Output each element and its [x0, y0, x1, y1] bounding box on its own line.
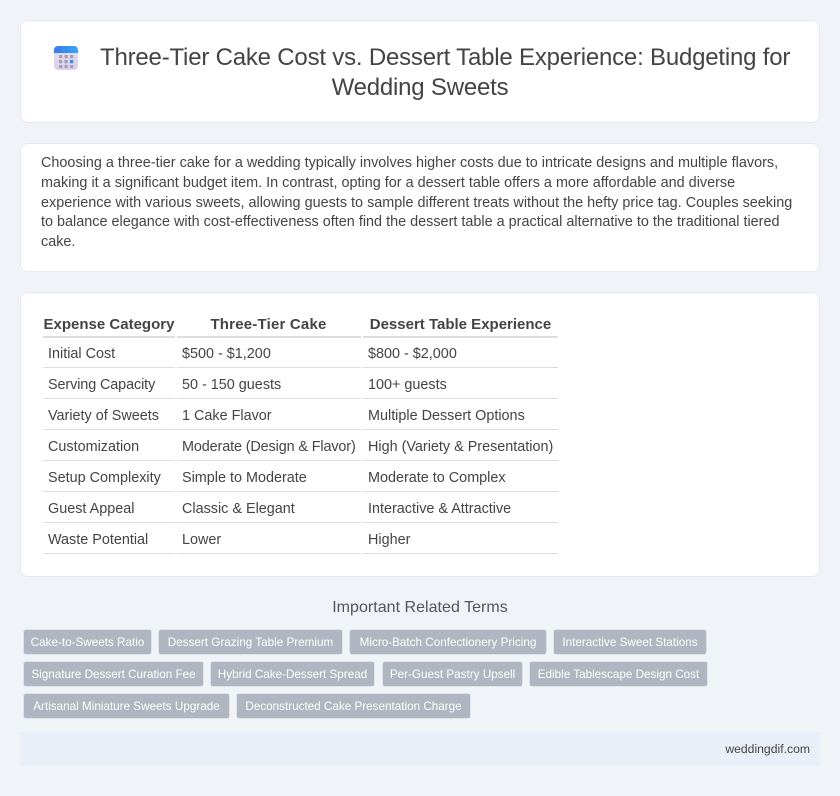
footer source: weddingdif.com: [725, 742, 810, 756]
row: waste potential: [48, 532, 410, 548]
row: customization: Customization: [48, 439, 139, 455]
icon: calendar: [54, 46, 78, 70]
row: variety of sweets: 1 Cake Flavor: [182, 408, 272, 424]
row: serving capacity: 100+ guests: [368, 377, 447, 393]
table header: Three-Tier Cake: [210, 316, 327, 333]
row: customization: [48, 439, 553, 455]
intro text: cake.: [41, 234, 75, 250]
tag: Micro-Batch Confectionery Pricing: [360, 636, 536, 649]
tag: Hybrid Cake-Dessert Spread: [218, 668, 367, 681]
related terms heading: Important Related Terms: [332, 598, 508, 616]
row: customization: Moderate (Design & Flavor): [182, 439, 356, 455]
tag: Dessert Grazing Table Premium: [168, 636, 333, 649]
row: waste potential: Waste Potential: [48, 532, 148, 548]
tag: [236, 693, 471, 719]
row: guest appeal: Classic & Elegant: [182, 501, 295, 517]
title: [100, 44, 790, 101]
tag: [382, 661, 523, 687]
row: setup complexity: Setup Complexity: [48, 470, 161, 486]
row: initial cost: [48, 346, 457, 362]
intro text: experience with various sweets, allowing guests to sample different treats without the hefty price tag. Couples seeking: [41, 195, 792, 211]
row: guest appeal: [48, 501, 511, 517]
tag: [553, 629, 707, 655]
table header: Expense Category: [44, 316, 174, 333]
tag: Cake-to-Sweets Ratio: [31, 636, 144, 649]
row: serving capacity: 50 - 150 guests: [182, 377, 281, 393]
related term tags: [23, 629, 708, 719]
row: guest appeal: Interactive & Attractive: [368, 501, 511, 517]
row: setup complexity: [48, 470, 506, 486]
tag: Signature Dessert Curation Fee: [31, 668, 196, 681]
row: serving capacity: Serving Capacity: [48, 377, 155, 393]
intro text: to balance elegance with cost-effectiveness often find the dessert table a practical alternative to the traditional tiered: [41, 214, 780, 230]
tag: Per-Guest Pastry Upsell: [390, 668, 515, 681]
title: Wedding Sweets: [332, 74, 508, 101]
row: customization: High (Variety & Presentation): [368, 439, 553, 455]
tag: [210, 661, 375, 687]
intro text: [41, 155, 792, 250]
row: setup complexity: Simple to Moderate: [182, 470, 307, 486]
tag: [529, 661, 708, 687]
row: initial cost: Initial Cost: [48, 346, 115, 362]
tag: [23, 661, 204, 687]
row: variety of sweets: [48, 408, 525, 424]
row: variety of sweets: Multiple Dessert Options: [368, 408, 525, 424]
footer bar: [20, 732, 820, 766]
row: guest appeal: Guest Appeal: [48, 501, 134, 517]
tag: [349, 629, 547, 655]
tag: [23, 629, 152, 655]
row: initial cost: $800 - $2,000: [368, 346, 457, 362]
tag: Interactive Sweet Stations: [562, 636, 698, 649]
row: setup complexity: Moderate to Complex: [368, 470, 506, 486]
tag: Edible Tablescape Design Cost: [538, 668, 699, 681]
header panel: [20, 20, 820, 123]
row: variety of sweets: Variety of Sweets: [48, 408, 159, 424]
tag: Artisanal Miniature Sweets Upgrade: [33, 700, 220, 713]
tag: [23, 693, 230, 719]
row: waste potential: Higher: [368, 532, 410, 548]
row: serving capacity: [48, 377, 447, 393]
table header: Dessert Table Experience: [370, 316, 551, 333]
intro text: Choosing a three-tier cake for a wedding typically involves higher costs due to intricate designs and multiple flavors,: [41, 155, 778, 171]
tag: Deconstructed Cake Presentation Charge: [245, 700, 462, 713]
panel: comparison table: [20, 292, 820, 577]
tag: [158, 629, 343, 655]
intro text: making it a significant budget item. In contrast, opting for a dessert table offers a more affordable and diverse: [41, 175, 735, 191]
title: Three-Tier Cake Cost vs. Dessert Table Experience: Budgeting for: [100, 44, 790, 71]
row: waste potential: Lower: [182, 532, 221, 548]
panel: intro paragraph: [20, 143, 820, 272]
row: initial cost: $500 - $1,200: [182, 346, 271, 362]
